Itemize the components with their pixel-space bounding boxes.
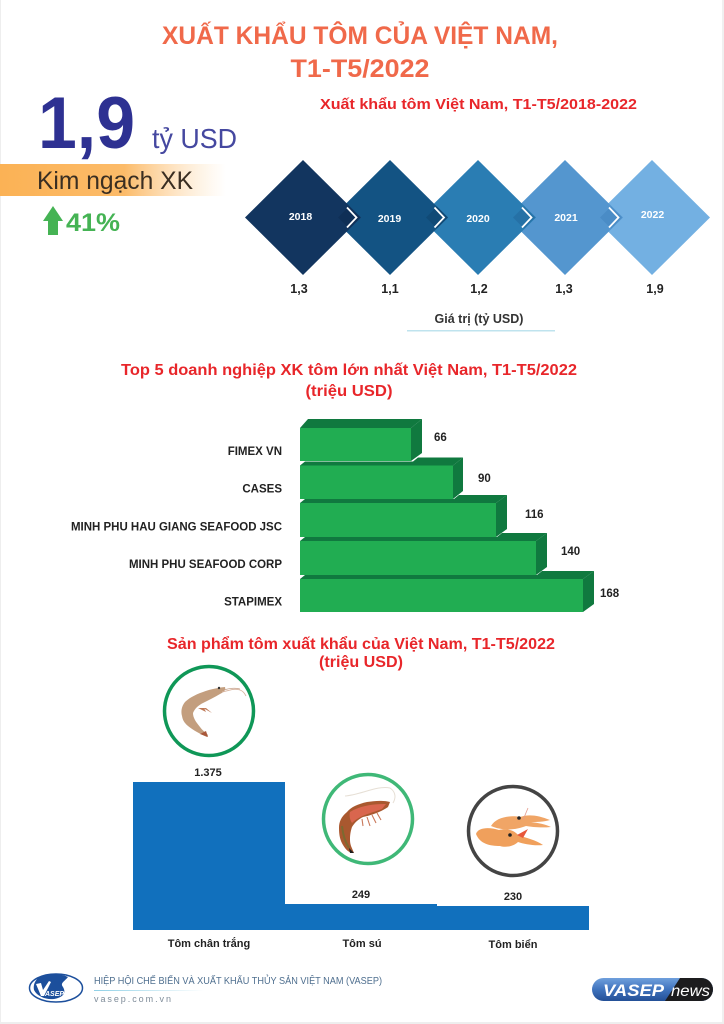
heading: top 5 companies: (triệu USD) (306, 383, 392, 400)
chart: product bars: 230 (504, 891, 522, 903)
heading: line of years: Xuất khẩu tôm Việt Nam, T1-T5/2018-2022 (320, 97, 637, 113)
icon: sea lobster (468, 786, 558, 876)
legend: value unit: Giá trị (tỷ USD) (435, 312, 523, 326)
title: T1-T5/2022 (290, 55, 430, 83)
chart: yearly diamonds: 1,3 (290, 282, 308, 296)
heading: shrimp products: (triệu USD) (319, 654, 403, 671)
chart: product bars: Tôm biển (489, 939, 538, 951)
company labels (71, 446, 282, 608)
footer: association name (94, 974, 382, 1004)
chart: yearly diamonds: 2022 (641, 209, 664, 221)
bar: FIMEX VN (300, 419, 422, 461)
title: XUẤT KHẨU TÔM CỦA VIỆT NAM, (162, 20, 558, 50)
footer: association name: HIỆP HỘI CHẾ BIẾN VÀ XUẤT KHẨU THỦY SẢN VIỆT NAM (VASEP) (94, 974, 382, 987)
title (162, 20, 558, 83)
value labels: 168 (600, 588, 620, 600)
bar: MINH PHU HAU GIANG SEAFOOD JSC (300, 495, 507, 537)
heading: top 5 companies (121, 362, 577, 400)
value labels: 90 (478, 473, 491, 485)
chart: yearly diamonds: 1,9 (646, 282, 664, 296)
heading: shrimp products: Sản phẩm tôm xuất khẩu của Việt Nam, T1-T5/2022 (167, 636, 555, 653)
company labels: FIMEX VN (228, 446, 282, 458)
band: Kim ngạch XK (0, 164, 226, 196)
chart: yearly diamonds: 2021 (554, 212, 578, 224)
heading: shrimp products (167, 636, 555, 671)
company labels: STAPIMEX (224, 596, 282, 608)
chart: yearly diamonds: 2020 (466, 213, 490, 225)
bar: CASES (300, 458, 463, 499)
logo: VASEP: ASEP (44, 991, 64, 998)
chart: product bars: 249 (352, 889, 370, 901)
chart: yearly diamonds: 1,2 (470, 282, 488, 296)
key figure: export value: tỷ USD (152, 123, 237, 154)
value labels: 66 (434, 432, 447, 444)
chart: yearly diamonds: 2019 (378, 213, 401, 225)
chart: yearly diamonds: 1,1 (381, 282, 399, 296)
chart: yearly diamonds: 2018 (289, 211, 312, 223)
company labels: MINH PHU SEAFOOD CORP (129, 559, 282, 571)
logo: VASEP news: VASEP (603, 981, 665, 1000)
logo: VASEP news: news (671, 983, 710, 1000)
value labels (434, 432, 620, 600)
bar: MINH PHU SEAFOOD CORP (300, 533, 547, 575)
growth indicator (43, 206, 120, 237)
logo: VASEP (30, 974, 82, 1002)
chart: product bars: 1.375 (194, 767, 222, 779)
company labels: MINH PHU HAU GIANG SEAFOOD JSC (71, 522, 282, 534)
chart: product bars: Tôm chân trắng (168, 937, 250, 950)
value labels: 116 (525, 509, 544, 521)
icon: white-leg shrimp (164, 666, 254, 756)
band: Kim ngạch XK: Kim ngạch XK (37, 167, 193, 195)
logo: VASEP news (592, 978, 713, 1001)
chart: product bars: Tôm sú (342, 938, 382, 950)
value labels: 140 (561, 546, 580, 558)
company labels: CASES (242, 484, 282, 496)
chart: product bars (133, 767, 589, 951)
footer: association name: vasep.com.vn (94, 994, 171, 1004)
icon: black tiger shrimp (324, 774, 412, 864)
key figure: export value: 1,9 (38, 83, 135, 164)
chart: yearly diamonds (245, 160, 710, 296)
chart: top 5 companies 3D bars (71, 419, 620, 612)
bar: STAPIMEX (300, 571, 594, 612)
chart: yearly diamonds: 1,3 (555, 282, 573, 296)
key figure: export value (38, 83, 237, 164)
heading: top 5 companies: Top 5 doanh nghiệp XK tôm lớn nhất Việt Nam, T1-T5/2022 (121, 362, 577, 379)
growth indicator: 41% (66, 209, 120, 237)
